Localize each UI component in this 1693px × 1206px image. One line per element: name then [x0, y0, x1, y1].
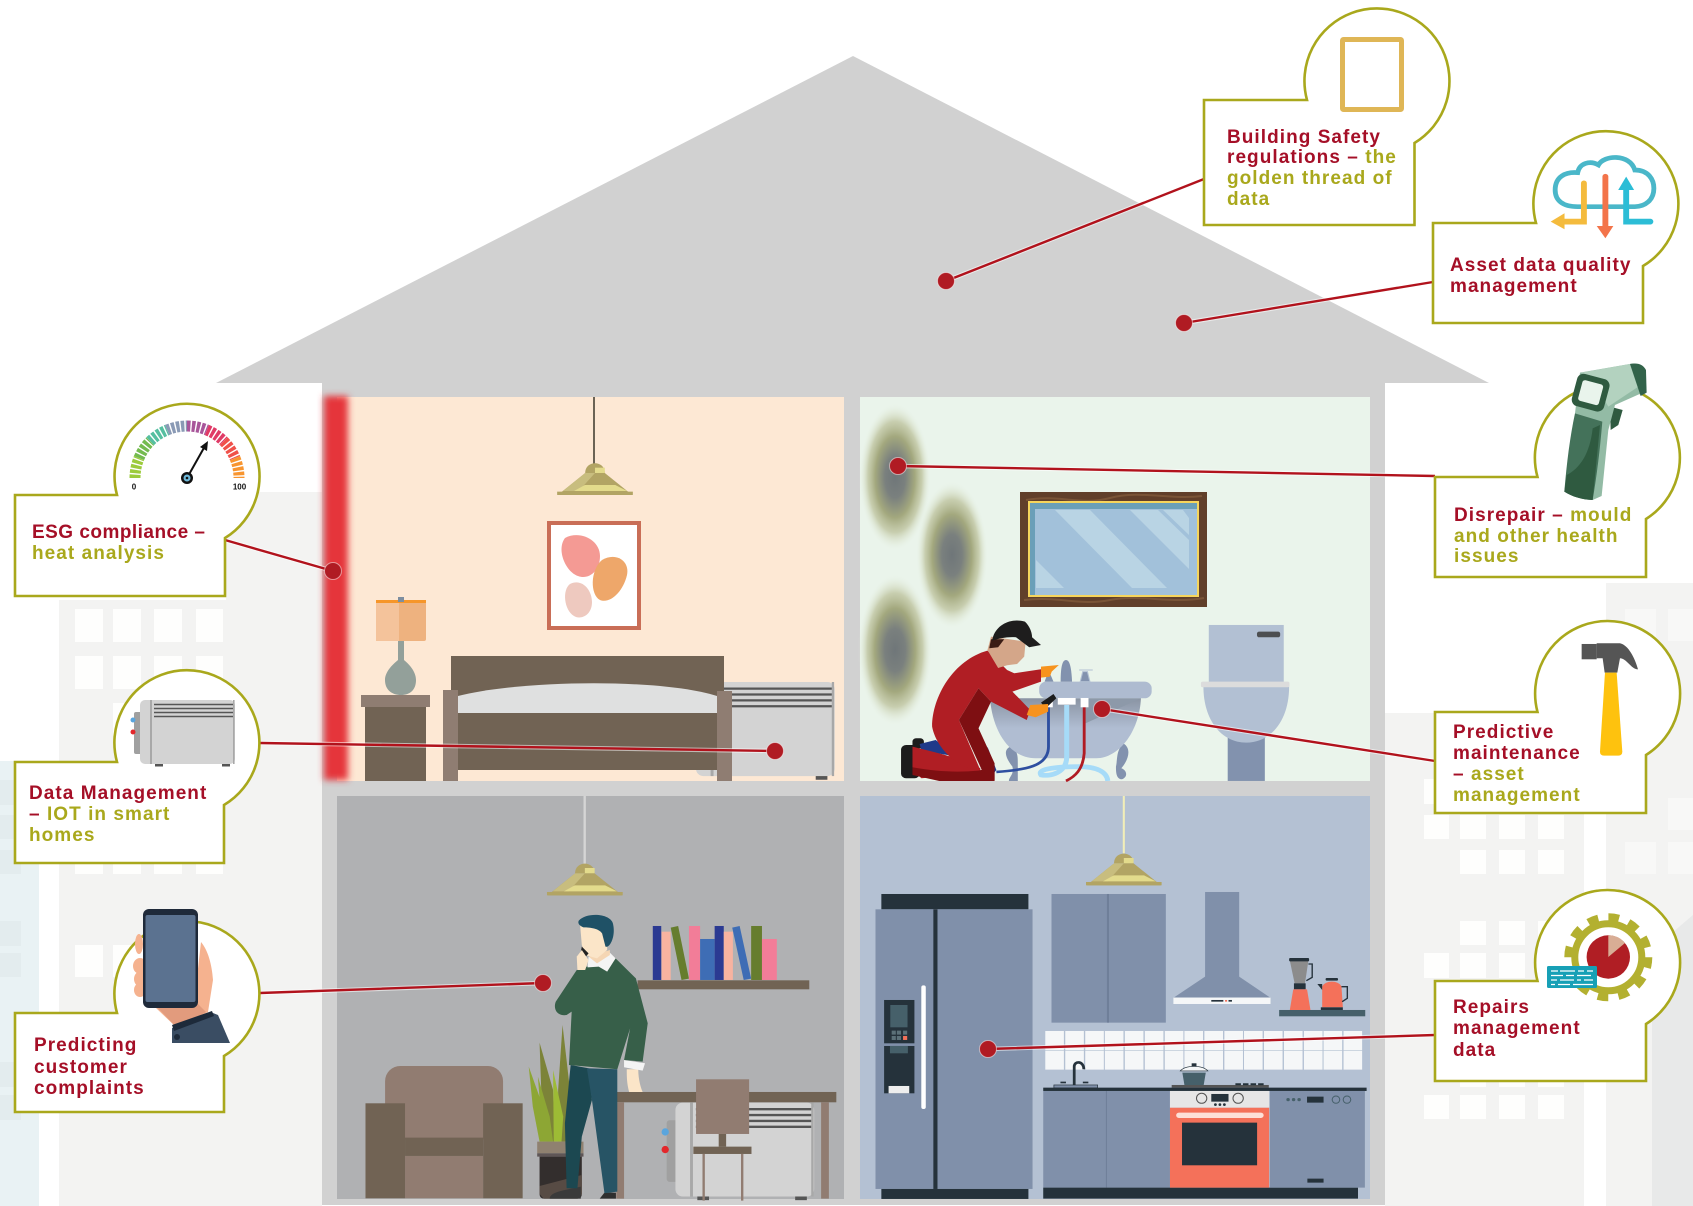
icon: cloud with data arrows [1551, 157, 1654, 238]
text: Asset data quality: Asset data quality [1450, 255, 1632, 276]
icon: golden frame [1342, 40, 1402, 110]
callout: Building Safety regulations [1204, 8, 1449, 225]
text: Repairs: Repairs [1453, 997, 1530, 1018]
house: roof [216, 56, 1489, 383]
cooker hood [1173, 892, 1271, 1004]
text: IOT in smart: – IOT in smart [29, 804, 170, 825]
room: bedroom [337, 397, 844, 781]
armchair [365, 1066, 523, 1198]
text: data: data [1227, 189, 1270, 210]
text: regulations – the: regulations – the [1227, 147, 1397, 168]
icon: gauge: 100 [233, 482, 247, 492]
text: heat analysis: heat analysis [32, 543, 165, 564]
text: complaints: complaints [34, 1078, 145, 1099]
icon: infrared thermometer [1564, 363, 1647, 500]
room: kitchen [860, 796, 1370, 1199]
callout: Data Management [15, 670, 259, 863]
callout: Predicting customer complaints [15, 909, 259, 1112]
text: and other health: and other health [1454, 526, 1619, 547]
pendant lamp: living room [547, 796, 623, 895]
icon: gear with pie chart and keyboard [1547, 918, 1647, 996]
text: Data Management: Data Management [29, 783, 207, 804]
pendant lamp: kitchen [1086, 796, 1162, 885]
icon: hand holding phone [133, 909, 230, 1043]
man on phone [550, 915, 648, 1199]
text: Predicting: Predicting [34, 1035, 137, 1056]
text: homes: homes [29, 825, 96, 846]
toilet [1201, 625, 1289, 781]
callout: Repairs management data [1435, 890, 1680, 1081]
text: management: management [1453, 1018, 1581, 1039]
radiator: bedroom [682, 682, 835, 780]
icon: gauge: 0 [132, 482, 137, 492]
worktop and base cabinets [1043, 1088, 1367, 1199]
text: golden thread of: golden thread of [1227, 168, 1393, 189]
hob and pot [1172, 1063, 1269, 1088]
text: maintenance: maintenance [1453, 743, 1581, 764]
oven [1170, 1091, 1269, 1188]
text: customer: customer [34, 1057, 128, 1078]
room: living room [337, 796, 844, 1201]
mould patches [858, 403, 988, 726]
icon: gauge [132, 426, 247, 492]
marker dots [324, 272, 1192, 1058]
callout: Disrepair [1435, 363, 1680, 577]
mirror [1020, 492, 1207, 607]
bed [443, 656, 732, 781]
dishwasher [1270, 1091, 1365, 1188]
wall cabinet [1051, 894, 1166, 1023]
plumber [901, 620, 1059, 781]
text: – asset: – asset [1453, 764, 1525, 785]
house: walls [322, 383, 1385, 1205]
callout: ESG compliance [15, 404, 260, 596]
icon: hammer [1582, 643, 1638, 756]
text: ESG compliance: ESG compliance – [32, 522, 206, 543]
text: Predictive: Predictive [1453, 722, 1554, 743]
chair [693, 1079, 751, 1201]
text: data: data [1453, 1040, 1496, 1061]
background: city buildings [0, 492, 1693, 1206]
text: Disrepair – mould: Disrepair – mould [1454, 505, 1632, 526]
fridge [875, 894, 1033, 1199]
bedside table and lamp [361, 597, 430, 781]
desk [608, 1092, 836, 1199]
heat loss strip [324, 396, 348, 780]
sink and pipes [990, 660, 1152, 781]
callout: Asset data quality management [1433, 131, 1678, 323]
bookshelf [638, 926, 809, 989]
wall picture [549, 523, 639, 628]
text: management: management [1453, 785, 1581, 806]
icon: radiator [130, 700, 235, 766]
callout: Predictive maintenance [1435, 621, 1680, 813]
splashback tiles [1045, 1031, 1362, 1070]
connector lines [225, 179, 1435, 1049]
room: bathroom [858, 397, 1370, 781]
sink tap [1054, 1062, 1098, 1088]
radiator: living room [662, 1103, 814, 1200]
potted plant [529, 1025, 584, 1199]
text: management: management [1450, 276, 1578, 297]
text: Building Safety: Building Safety [1227, 127, 1381, 148]
shelf with blender and kettle [1279, 958, 1365, 1016]
pendant lamp: bedroom [557, 397, 633, 495]
text: issues: issues [1454, 546, 1519, 567]
